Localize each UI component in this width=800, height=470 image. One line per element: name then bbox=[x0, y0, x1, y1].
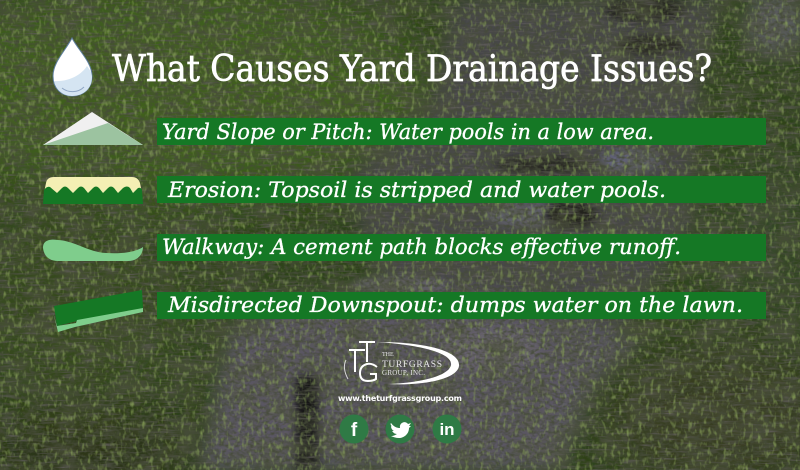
icon: walkway bbox=[43, 240, 143, 261]
icon: erosion bbox=[43, 177, 143, 204]
title: What Causes Yard Drainage Issues? bbox=[112, 49, 712, 90]
row 1: yard slope: Yard Slope or Pitch: Water pools in a low area. bbox=[162, 120, 654, 144]
icon: misdirected downspout bbox=[53, 290, 143, 332]
row 2: erosion bbox=[157, 176, 766, 203]
logo: The Turfgrass Group: THE bbox=[382, 352, 394, 358]
logo: The Turfgrass Group bbox=[344, 342, 459, 384]
icon: linkedin bbox=[432, 414, 462, 444]
icon: twitter bbox=[386, 414, 414, 444]
website url: www.theturfgrassgroup.com bbox=[338, 394, 462, 403]
row 4: misdirected downspout: Misdirected Downspout: dumps water on the lawn. bbox=[167, 293, 743, 317]
icon: facebook: f bbox=[351, 420, 358, 441]
icon: linkedin: in bbox=[439, 420, 455, 439]
row 3: walkway: Walkway: A cement path blocks effective runoff. bbox=[162, 235, 681, 259]
row 2: erosion: Erosion: Topsoil is stripped and water pools. bbox=[167, 178, 666, 202]
logo: The Turfgrass Group: TURFGRASS bbox=[382, 360, 442, 370]
icon: water drop bbox=[53, 38, 92, 96]
logo: The Turfgrass Group: GROUP, INC. bbox=[382, 369, 425, 377]
icon: facebook bbox=[340, 414, 368, 444]
icon: yard slope bbox=[43, 112, 143, 145]
